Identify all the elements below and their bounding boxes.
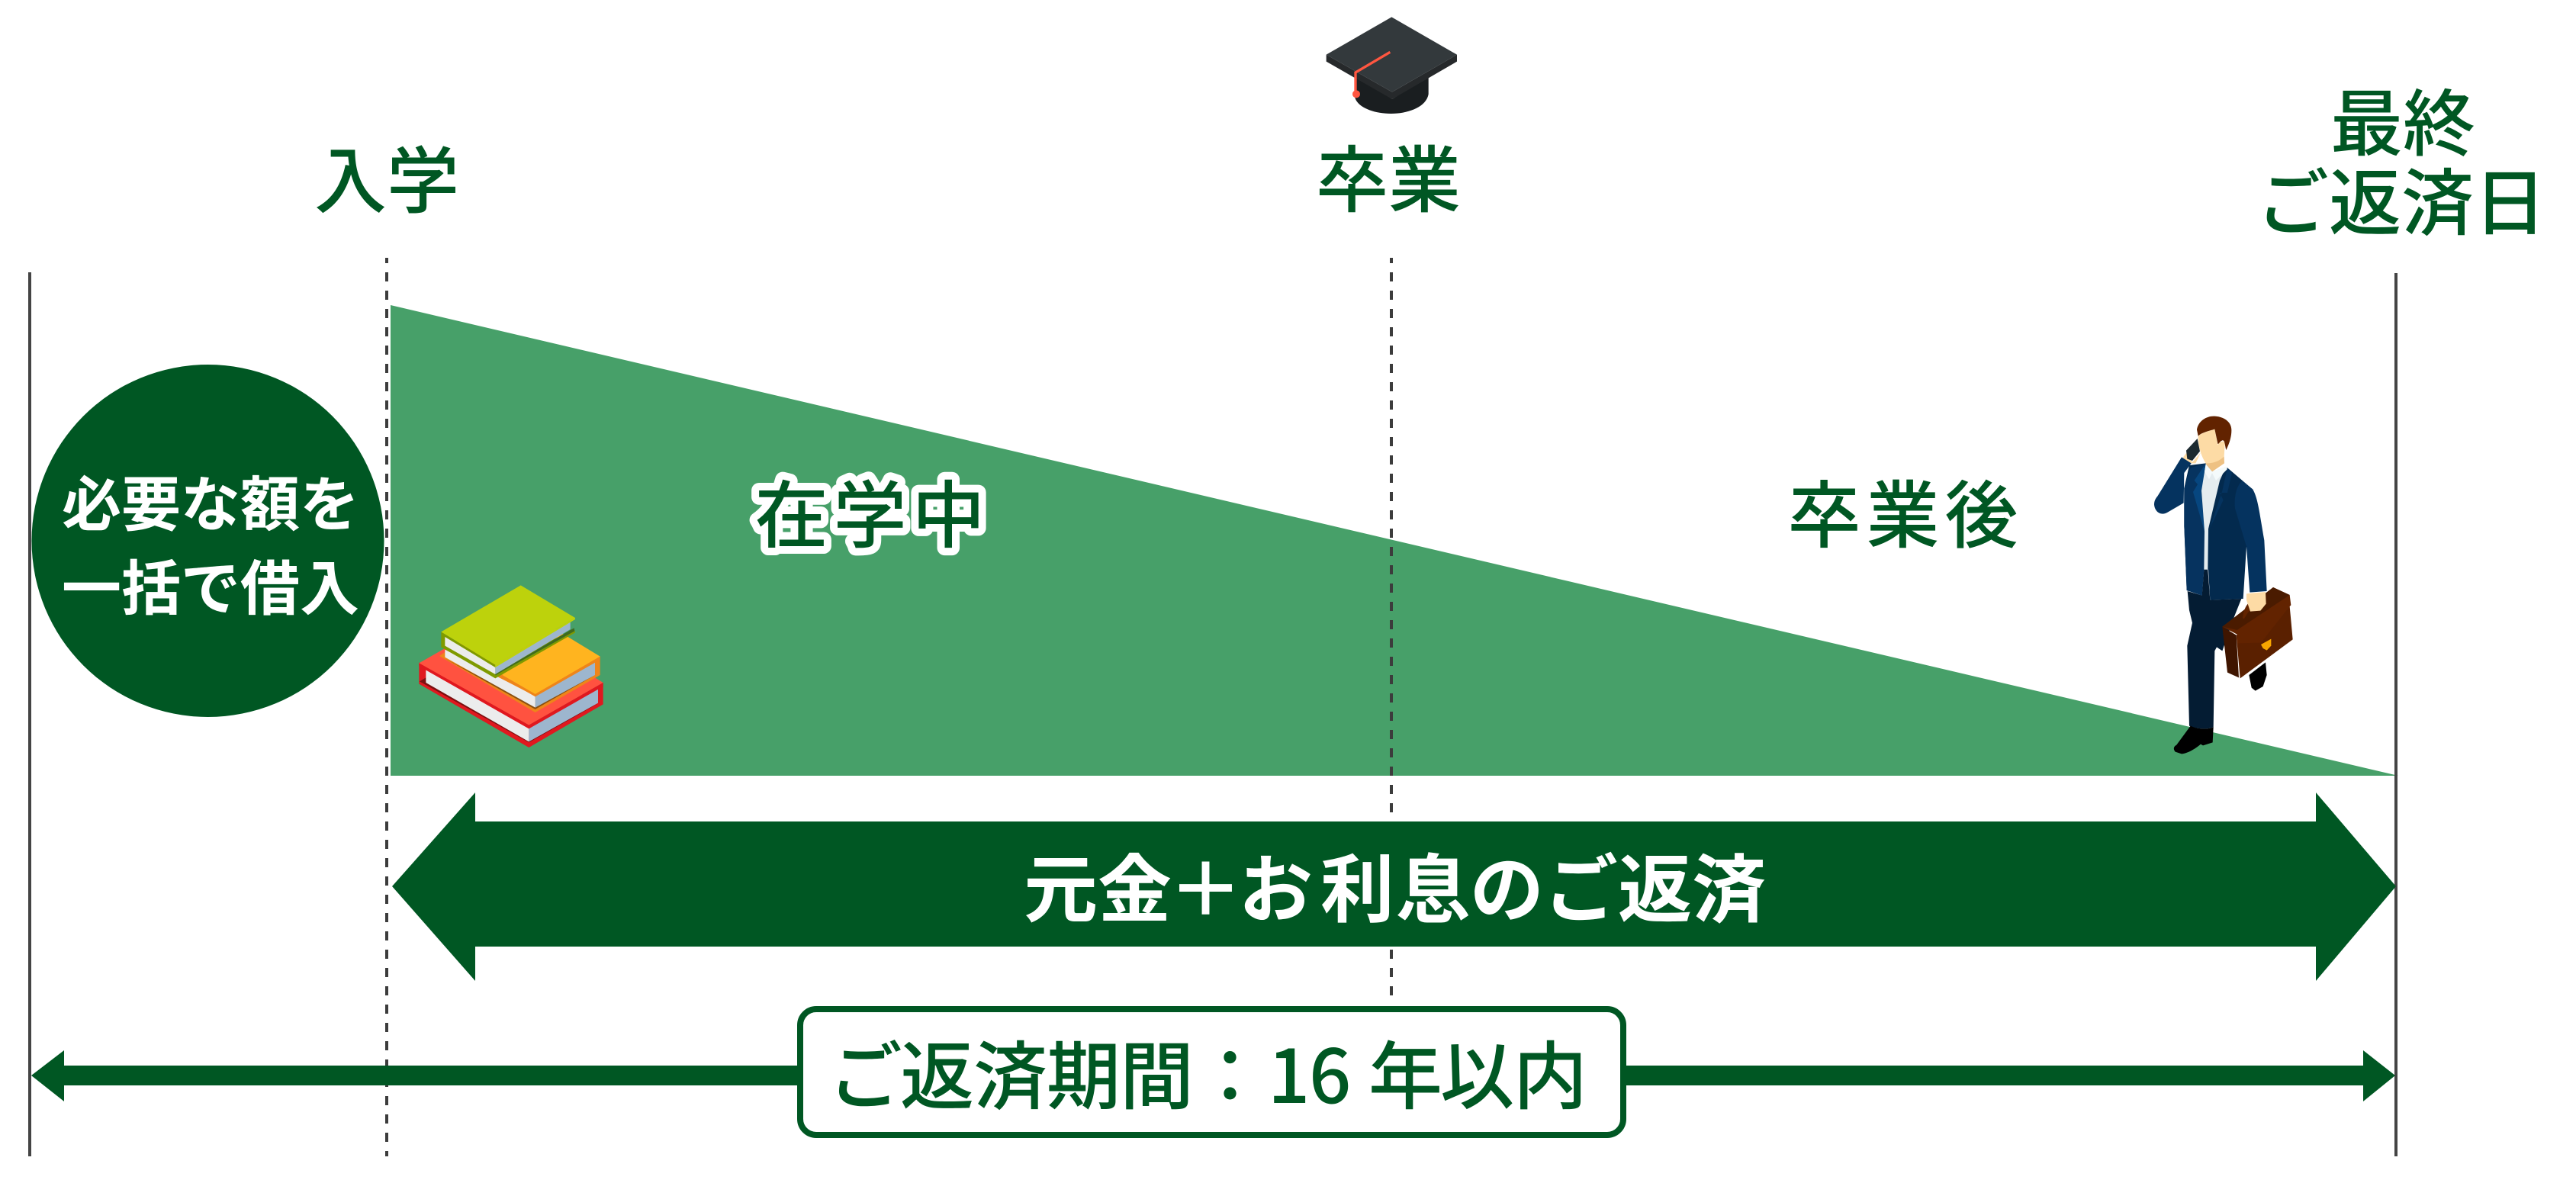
- arrow: principal plus interest repayment: [392, 793, 2396, 981]
- callout: repayment period 16 years: ご返済期間：16 年以内: [828, 1017, 1587, 1124]
- label: during school: 在学中: [755, 457, 990, 563]
- arrow: principal plus interest repayment: 元金＋お利息のご返済: [1024, 830, 1766, 937]
- heading: graduation: 卒業: [1316, 123, 1461, 227]
- heading: enrollment: 入学: [314, 124, 459, 228]
- arrow: repayment period span: [31, 1050, 2395, 1101]
- label: after graduation: 卒業後: [1788, 457, 2023, 563]
- icon: businessman on the phone with briefcase: [2154, 416, 2293, 754]
- heading: final repayment date: [2256, 66, 2546, 250]
- icon: graduation cap: [1327, 17, 1457, 114]
- icon: stack of books: [419, 585, 603, 748]
- circle: borrow the needed amount in a lump sum: 一括で借入: [62, 542, 359, 627]
- circle: borrow the needed amount in a lump sum: 必要な額を: [62, 458, 359, 543]
- heading: final repayment date: ご返済日: [2256, 146, 2546, 250]
- circle: borrow the needed amount in a lump sum: [32, 365, 384, 717]
- heading: final repayment date: 最終: [2330, 66, 2475, 171]
- triangle: remaining balance: [391, 305, 2398, 776]
